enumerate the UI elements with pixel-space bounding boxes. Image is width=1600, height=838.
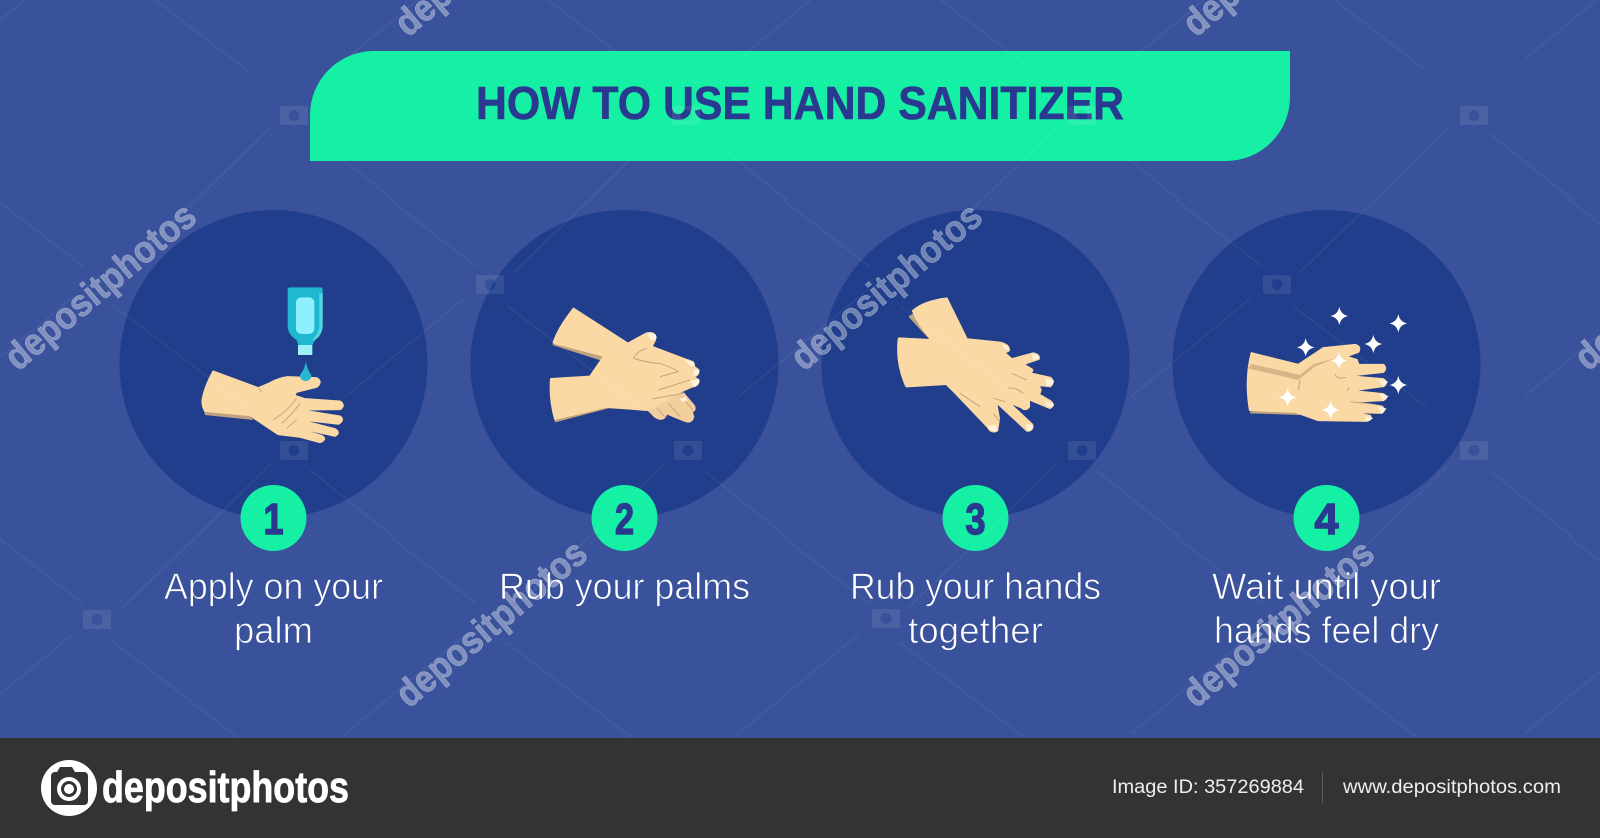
step 2 number badge: 2 xyxy=(615,495,634,544)
panel: step 3 circle xyxy=(822,210,1130,518)
icon: depositphotos camera logo xyxy=(41,760,97,816)
step 1 number badge xyxy=(240,485,306,551)
icon: fingernails xyxy=(988,344,1054,431)
text: step 3 caption xyxy=(850,566,1101,651)
icon: hands rubbed together xyxy=(899,297,1054,431)
text: step 4 caption: hands feel dry xyxy=(1214,610,1439,651)
watermark: depositphotos text and cameras: depositphotos xyxy=(0,195,205,379)
icon: bottle xyxy=(288,287,323,355)
text: step 2 caption: Rub your palms xyxy=(499,566,750,607)
footer bar xyxy=(0,738,1600,838)
step 4 number badge xyxy=(1294,485,1360,551)
footer image ID: Image ID: 357269884 xyxy=(1112,777,1304,798)
text: step 4 caption xyxy=(1212,566,1441,651)
text: step 1 caption xyxy=(164,566,383,651)
panel: step 4 circle xyxy=(1172,210,1480,518)
footer website: www.depositphotos.com xyxy=(1342,777,1561,798)
title banner xyxy=(310,51,1290,161)
step 2 number badge xyxy=(592,485,658,551)
icon: open hand xyxy=(203,372,343,442)
text: step 3 caption: Rub your hands xyxy=(850,566,1101,607)
panel: step 1 circle xyxy=(120,210,428,518)
text: step 4 caption: Wait until your xyxy=(1212,566,1441,607)
panel: step 2 circle xyxy=(470,210,778,518)
icon: fingernails xyxy=(1365,379,1389,422)
icon: sanitizer bottle with drop above hand xyxy=(203,287,343,442)
footer logo text: depositphotos xyxy=(102,763,349,812)
title: HOW TO USE HAND SANITIZER xyxy=(476,77,1124,129)
text: step 1 caption: Apply on your xyxy=(164,566,383,607)
watermark: depositphotos text and cameras: depositphotos xyxy=(1175,532,1383,716)
icon: sparkles xyxy=(1279,307,1407,419)
icon: fingernails xyxy=(647,333,699,402)
step 3 number badge xyxy=(942,485,1008,551)
icon: drop xyxy=(300,362,311,381)
watermark: depositphotos text and cameras: depositphotos xyxy=(388,532,596,716)
step 1 number badge: 1 xyxy=(264,495,284,544)
step 4 number badge: 4 xyxy=(1314,495,1339,544)
icon: rubbing palms xyxy=(551,307,699,422)
watermark: depositphotos text and cameras: depositphotos xyxy=(783,195,991,379)
step 3 number badge: 3 xyxy=(966,495,986,544)
text: step 1 caption: palm xyxy=(234,610,313,651)
text: step 3 caption: together xyxy=(908,610,1043,651)
icon: drying hands with sparkles xyxy=(1248,307,1407,422)
